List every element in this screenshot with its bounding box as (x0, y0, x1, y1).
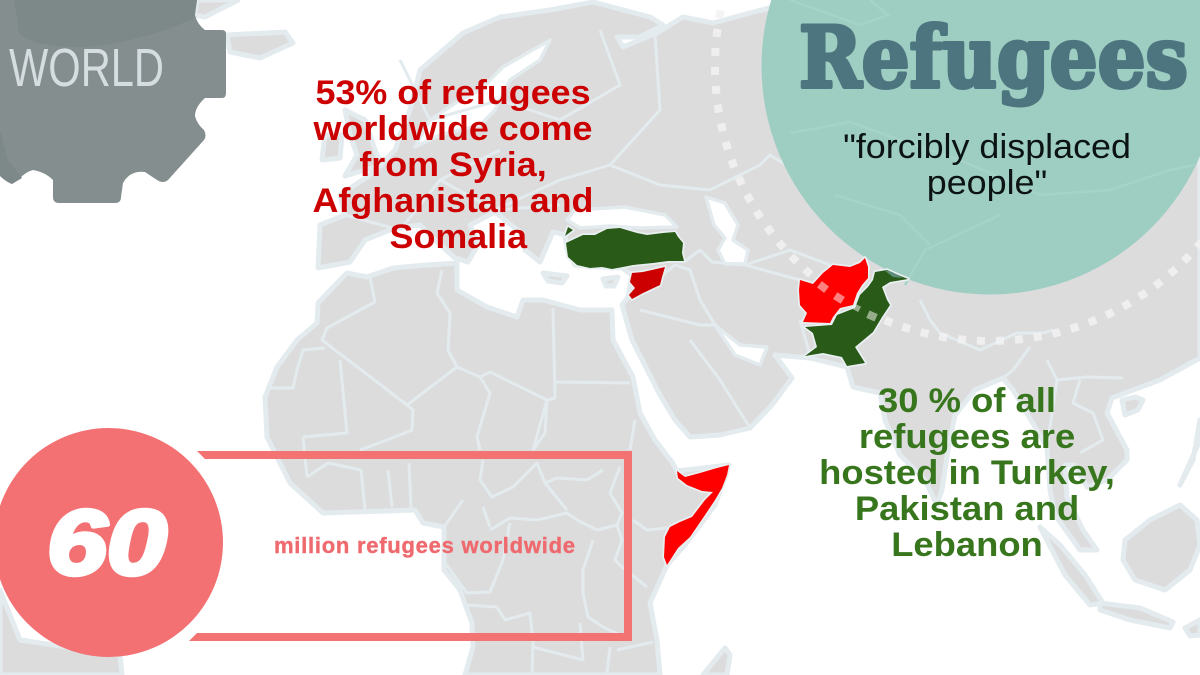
land tint under gear (14, 0, 197, 47)
callout: host countries: Pakistan and (855, 490, 1079, 528)
stat circle (0, 428, 223, 657)
callout: origin countries: from Syria, (359, 146, 547, 184)
gear panel (0, 0, 226, 203)
callout: host countries: Lebanon (891, 526, 1043, 564)
Somalia (664, 465, 729, 565)
highlighted countries (565, 227, 908, 565)
callout: host countries: hosted in Turkey, (819, 454, 1115, 492)
callout: origin countries: Somalia (390, 218, 528, 256)
gear label: WORLD (9, 38, 164, 98)
seas (415, 40, 767, 365)
country borders (267, 30, 1123, 675)
callout: origin countries: 53% of refugees (315, 74, 591, 112)
callout: origin countries: worldwide come (312, 110, 592, 148)
stat label: million refugees worldwide (274, 533, 575, 558)
dotted orbit ring (715, 0, 1200, 341)
callout: host countries: 30 % of all (878, 382, 1056, 420)
Syria (629, 267, 665, 299)
ring dashes over Afghanistan and Pakistan (817, 281, 878, 321)
statistic: 60 million refugees (0, 428, 632, 657)
subtitle: "forcibly displaced (843, 128, 1131, 166)
stat number: 60 (47, 491, 167, 594)
stat frame (189, 451, 632, 641)
title circle (762, 0, 1200, 294)
Pakistan (805, 270, 908, 366)
Afghanistan (799, 258, 868, 323)
callout: origin countries: Afghanistan and (313, 182, 593, 220)
subtitle: people" (927, 164, 1047, 202)
Pakistan tip under circle tint (884, 270, 903, 278)
callout: host countries: refugees are (859, 418, 1075, 456)
Turkey (565, 227, 684, 269)
